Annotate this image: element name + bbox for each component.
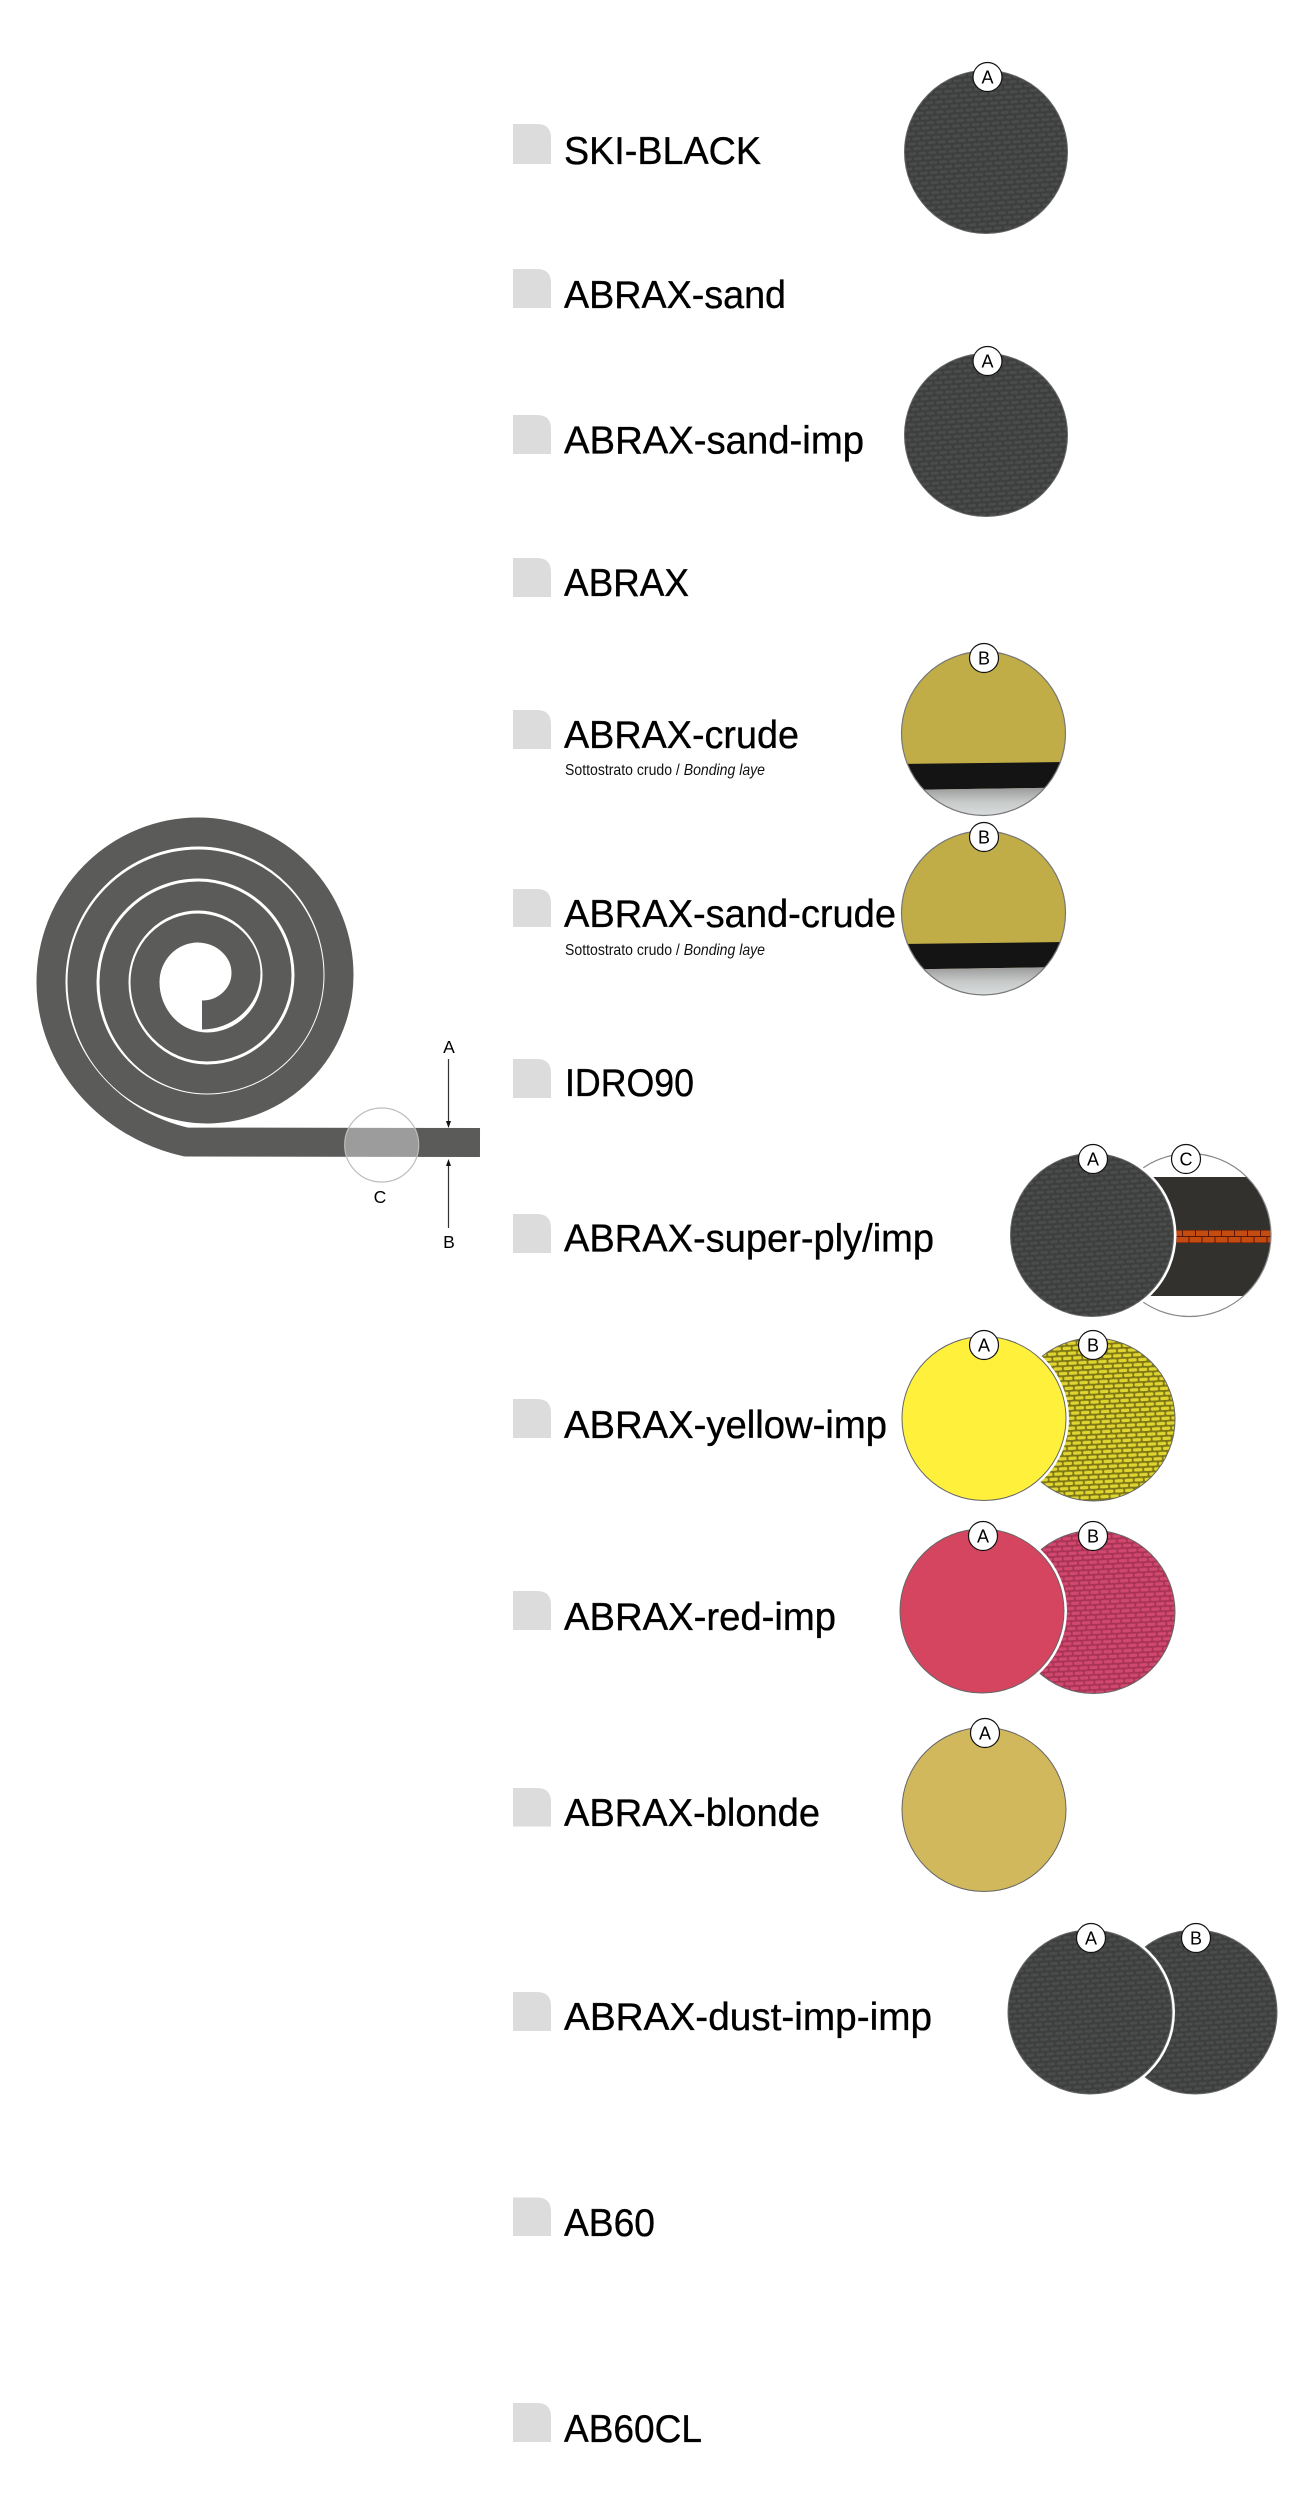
label B with arrow: B: [443, 1232, 455, 1252]
icon: tab: [513, 2198, 551, 2236]
label B with arrow: [443, 1159, 455, 1252]
label: ABRAX-super-ply/imp: [564, 1218, 934, 1260]
row: ABRAX: [513, 558, 689, 605]
label: IDRO90: [565, 1062, 694, 1105]
row: ABRAX-super-ply/imp: [513, 1144, 1280, 1320]
label A with arrow: [443, 1037, 455, 1128]
label C: C: [374, 1187, 386, 1207]
row: ABRAX-sand: [513, 269, 786, 317]
row: AB60: [513, 2198, 655, 2245]
swatch A: A: [978, 1336, 990, 1356]
label: ABRAX-red-imp: [564, 1596, 836, 1639]
icon: tab: [513, 1214, 551, 1253]
swatch B: B: [1087, 1526, 1099, 1546]
swatch A: A: [1085, 1928, 1097, 1948]
swatch B: B: [978, 648, 990, 668]
label A with arrow: A: [443, 1037, 455, 1057]
detail circle C: [345, 1108, 419, 1182]
row: ABRAX-red-imp: [513, 1522, 1175, 1696]
icon: tab: [513, 2403, 551, 2442]
row: ABRAX-sand-crude: [513, 822, 1070, 1000]
sublabel: Sottostrato crudo / Bonding laye: [565, 762, 765, 779]
swatch A: A: [977, 1526, 989, 1546]
label: SKI-BLACK: [564, 130, 761, 173]
label: ABRAX-sand-imp: [564, 420, 864, 462]
swatch B: B: [978, 828, 990, 848]
swatch A: A: [981, 352, 994, 372]
label: AB60: [564, 2202, 655, 2245]
label: ABRAX: [564, 562, 689, 605]
icon: tab: [513, 1059, 551, 1098]
sublabel: Sottostrato crudo / Bonding laye: [565, 942, 765, 959]
swatch A: [897, 1522, 1067, 1696]
icon: tab: [513, 269, 551, 308]
row: IDRO90: [513, 1059, 694, 1105]
swatch A: [904, 62, 1068, 234]
swatch B: [900, 644, 1070, 820]
label: ABRAX-yellow-imp: [564, 1404, 887, 1447]
row: AB60CL: [513, 2403, 702, 2451]
swatch B: B: [1087, 1336, 1099, 1356]
row: ABRAX-yellow-imp: [513, 1330, 1175, 1504]
row: ABRAX-crude: [513, 644, 1070, 820]
icon: tab: [513, 710, 551, 749]
icon: tab: [513, 415, 551, 454]
swatch B: [1012, 1330, 1175, 1501]
swatch B: [900, 822, 1070, 1000]
icon: tab: [513, 1591, 551, 1630]
swatch A: [902, 1718, 1066, 1892]
icon: tab: [513, 558, 551, 597]
label: ABRAX-crude: [564, 714, 799, 757]
label: ABRAX-dust-imp-imp: [564, 1996, 932, 2039]
label: ABRAX-sand-crude: [564, 893, 896, 936]
row: ABRAX-sand-imp: [513, 346, 1068, 516]
swatch A: [1008, 1144, 1176, 1320]
swatch A: A: [1087, 1150, 1099, 1170]
swatch B: B: [1190, 1928, 1202, 1948]
icon: tab: [513, 1399, 551, 1438]
swatch A: [1005, 1924, 1175, 2097]
icon: tab: [513, 1992, 551, 2031]
label: ABRAX-sand: [564, 274, 786, 317]
swatch A: A: [979, 1724, 991, 1744]
spiral roll: [51, 832, 480, 1142]
icon: tab: [513, 889, 551, 927]
label: AB60CL: [564, 2408, 702, 2451]
roll diagram: [51, 832, 480, 1252]
row: SKI-BLACK: [513, 62, 1068, 234]
row: ABRAX-dust-imp-imp: [513, 1924, 1277, 2097]
swatch B: [1012, 1522, 1175, 1694]
icon: tab: [513, 1788, 551, 1826]
swatch C: [1143, 1144, 1272, 1318]
swatch A: A: [981, 68, 994, 88]
icon: tab: [513, 124, 551, 164]
label: ABRAX-blonde: [564, 1792, 820, 1835]
swatch B: [1113, 1924, 1277, 2094]
swatch A: [904, 346, 1068, 516]
row: ABRAX-blonde: [513, 1718, 1066, 1892]
swatch A: [899, 1330, 1069, 1504]
swatch C: C: [1180, 1150, 1192, 1170]
